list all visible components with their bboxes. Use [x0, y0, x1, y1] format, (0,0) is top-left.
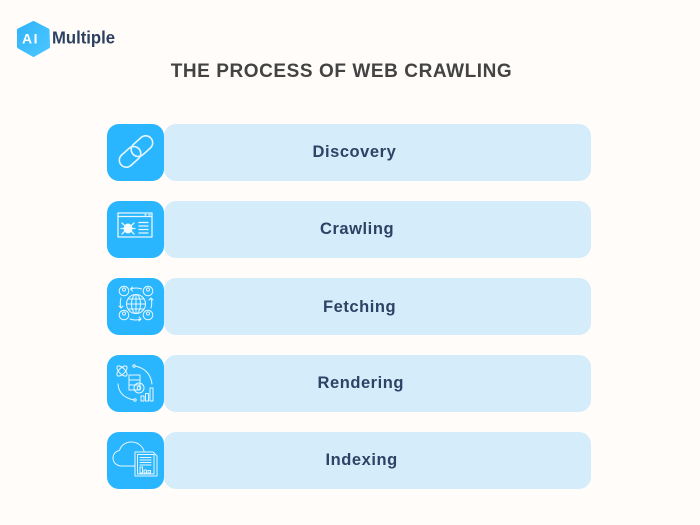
icon: data cycle with server and chart	[107, 355, 164, 412]
title: THE PROCESS OF WEB CRAWLING	[171, 61, 512, 82]
label: Crawling: Crawling	[320, 220, 394, 238]
icon: chain link	[107, 124, 164, 180]
label: Rendering: Rendering	[318, 374, 404, 392]
label: Fetching: Fetching	[323, 298, 396, 316]
bar: Fetching	[164, 278, 591, 334]
icon: globe with connected users	[107, 278, 164, 334]
bar: Crawling	[164, 201, 591, 258]
bar: Rendering	[164, 355, 591, 412]
label: Discovery: Discovery	[312, 143, 396, 161]
logo: AIMultiple: AI	[22, 30, 39, 46]
logo: AIMultiple	[17, 21, 115, 57]
bar: Indexing	[164, 432, 591, 488]
icon: cloud with document	[107, 432, 164, 488]
label: Indexing: Indexing	[326, 451, 398, 469]
icon: browser window with bug	[107, 201, 164, 258]
bar: Discovery	[164, 124, 591, 180]
